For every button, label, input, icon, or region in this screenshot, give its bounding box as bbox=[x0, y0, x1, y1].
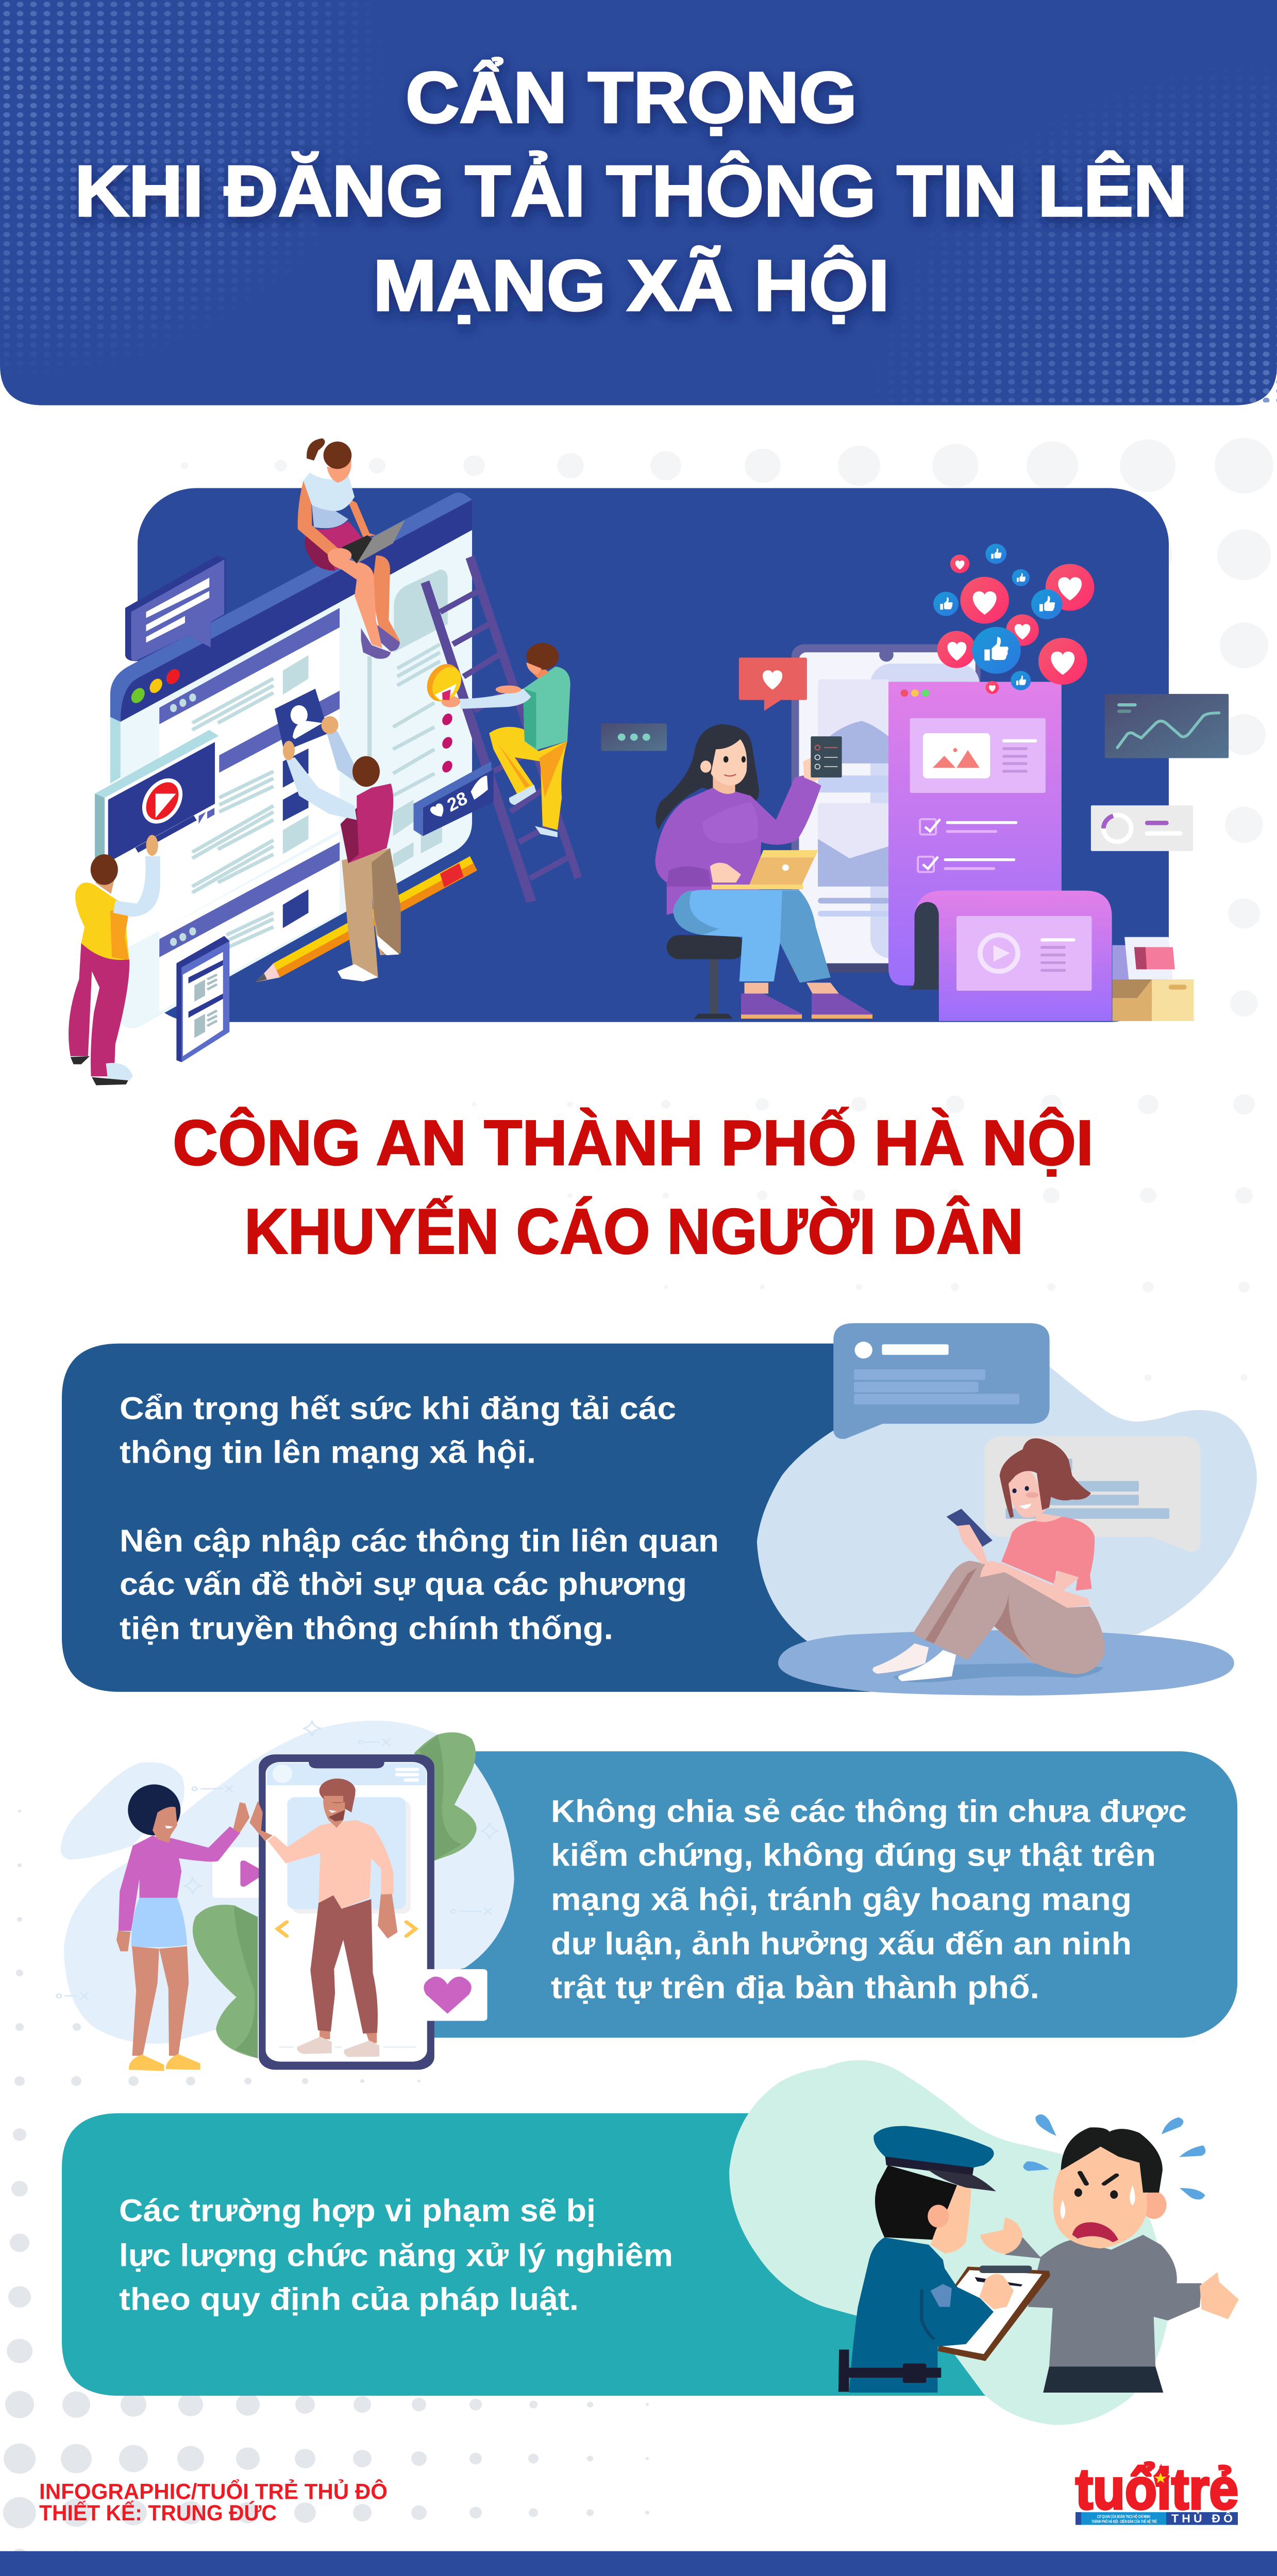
text: advice 3: Các trường hợp vi phạm sẽ bị bbox=[119, 2193, 596, 2228]
parcel boxes bbox=[1112, 937, 1194, 1021]
large phone bbox=[792, 645, 981, 972]
panel: advice 3 bbox=[62, 2060, 1239, 2425]
footer band bbox=[0, 2551, 1277, 2576]
man on screen bbox=[249, 1778, 397, 2057]
text: advice 1: Cẩn trọng hết sức khi đăng tải các bbox=[120, 1391, 676, 1426]
heading: police recommendation: KHUYẾN CÁO NGƯỜI DÂN bbox=[244, 1195, 1023, 1267]
text: advice 2: kiểm chứng, không đúng sự thật trên bbox=[551, 1838, 1156, 1873]
credits: INFOGRAPHIC/TUỔI TRẺ THỦ ĐÔ bbox=[39, 2479, 388, 2504]
video player panel bbox=[95, 730, 219, 959]
background dots: bottom left fade bbox=[3, 1810, 649, 2574]
text: advice 1: các vấn đề thời sự qua các phương bbox=[120, 1567, 687, 1602]
title: CẨN TRỌNG bbox=[406, 57, 857, 138]
credits bbox=[39, 2479, 388, 2526]
heading: police recommendation bbox=[173, 1107, 1094, 1267]
text: advice 1 bbox=[120, 1391, 719, 1646]
title: MẠNG XÃ HỘI bbox=[373, 245, 889, 326]
clipboard bbox=[937, 2266, 1050, 2361]
panel: advice 2 bbox=[57, 1721, 1237, 2071]
browser window bbox=[110, 493, 472, 1028]
background dots: top right fade bbox=[181, 438, 1273, 1381]
logo: Tuổi Trẻ Thủ Đô: THỦ ĐÔ bbox=[1171, 2513, 1233, 2525]
police officer bbox=[838, 2126, 1014, 2393]
pencil bbox=[256, 856, 477, 982]
emoji bbox=[421, 659, 467, 706]
heading: police recommendation: CÔNG AN THÀNH PHỐ HÀ NỘI bbox=[173, 1107, 1094, 1179]
illustration panel background bbox=[138, 488, 1169, 1022]
logo: Tuổi Trẻ Thủ Đô: tuổitrẻ bbox=[1076, 2457, 1238, 2521]
text: advice 2: trật tự trên địa bàn thành phố. bbox=[551, 1970, 1039, 2005]
ladder bbox=[421, 555, 582, 903]
purple document bbox=[888, 682, 1112, 1021]
logo: Tuổi Trẻ Thủ Đô: CƠ QUAN CỦA ĐOÀN TNCS HỒ CHÍ MINH bbox=[1097, 2514, 1150, 2519]
woman sitting with laptop bbox=[298, 438, 405, 659]
worried man bbox=[980, 2114, 1239, 2393]
man in magenta shirt bbox=[283, 716, 401, 981]
like counter bar bbox=[413, 761, 493, 836]
text: advice 2: dư luận, ảnh hưởng xấu đến an ninh bbox=[551, 1926, 1132, 1961]
title bbox=[75, 57, 1187, 326]
credits: THIẾT KẾ: TRUNG ĐỨC bbox=[39, 2500, 277, 2526]
logo: Tuổi Trẻ Thủ Đô: THÀNH PHỐ HÀ NỘI - DIỄN ĐÀN CỦA THẾ HỆ TRẺ bbox=[1091, 2518, 1157, 2524]
text: advice 3 bbox=[119, 2193, 673, 2317]
text: advice 1: Nên cập nhập các thông tin liên quan bbox=[120, 1523, 719, 1558]
red chat bubble bbox=[739, 657, 807, 711]
illustration: high five through phone bbox=[57, 1721, 514, 2071]
woman with laptop on stool bbox=[655, 724, 872, 1019]
text: advice 1: thông tin lên mạng xã hội. bbox=[120, 1435, 536, 1470]
text: advice 1: tiện truyền thông chính thống. bbox=[120, 1611, 613, 1646]
like counter bar: 28 bbox=[442, 788, 472, 816]
text: advice 3: theo quy định của pháp luật. bbox=[119, 2282, 579, 2317]
three dots chip bbox=[601, 723, 667, 751]
donut stat card bbox=[1091, 805, 1193, 851]
small phone bbox=[176, 936, 229, 1062]
title: KHI ĐĂNG TẢI THÔNG TIN LÊN bbox=[75, 150, 1187, 231]
speech bubble with lines bbox=[125, 555, 226, 661]
text: advice 3: lực lượng chức năng xử lý nghiêm bbox=[119, 2238, 673, 2273]
man in yellow shirt bbox=[69, 835, 160, 1085]
illustration: police officer and worried man bbox=[729, 2060, 1239, 2425]
panel: advice 1 bbox=[62, 1323, 1257, 1696]
text: advice 2: mạng xã hội, tránh gây hoang mang bbox=[551, 1882, 1132, 1917]
text: advice 2 bbox=[551, 1794, 1187, 2005]
profile card bbox=[275, 689, 329, 751]
text: advice 2: Không chia sẻ các thông tin chưa được bbox=[551, 1794, 1187, 1829]
illustration: woman reading phone bbox=[757, 1323, 1257, 1696]
line chart card bbox=[1105, 694, 1229, 758]
woman waving bbox=[116, 1785, 249, 2071]
illustration: social network browser with people bbox=[69, 438, 667, 1085]
hearts and likes cluster bbox=[933, 544, 1094, 694]
header banner bbox=[0, 0, 1277, 405]
person climbing ladder, green shirt bbox=[441, 643, 570, 837]
illustration: woman, phone and social reactions bbox=[655, 544, 1229, 1021]
